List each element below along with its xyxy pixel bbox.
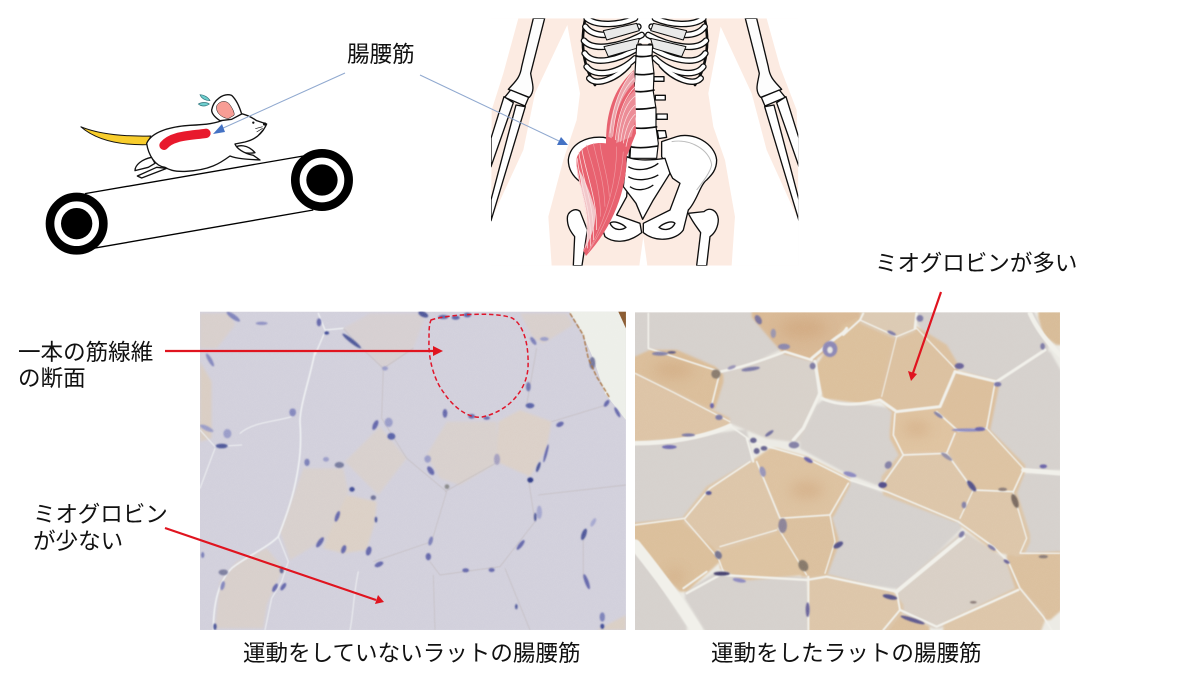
label: little myoglobin: が少ない — [33, 529, 123, 554]
white cell boundary network — [635, 313, 1060, 630]
rat ear — [212, 95, 242, 121]
white gap at top right — [569, 312, 626, 420]
treadmill belt — [85, 156, 313, 248]
label: many myoglobin: ミオグロビンが多い — [875, 251, 1077, 276]
femurs — [567, 209, 718, 266]
caption: trained rat: 運動をしたラットの腸腰筋 — [711, 641, 982, 666]
dashed outline of a single muscle fiber — [429, 314, 528, 417]
fiber boundaries — [200, 313, 358, 630]
label: iliopsoas: 腸腰筋 — [347, 42, 415, 67]
human skeleton with iliopsoas muscle — [480, 18, 810, 266]
left arm bones — [491, 18, 545, 221]
rib cage right — [648, 18, 707, 85]
rat body — [135, 113, 267, 178]
nuclei — [652, 314, 1048, 626]
rat tail — [81, 127, 151, 145]
label: cross-section of one muscle fiber: 一本の筋線維 — [18, 340, 153, 365]
grey low-myoglobin fibers — [635, 313, 1060, 630]
brown fiber edge — [570, 313, 610, 398]
rat nose and whiskers — [252, 122, 266, 135]
pelvis and sacrum — [568, 135, 717, 241]
treadmill roller: upper right — [295, 153, 349, 207]
iliopsoas muscle — [577, 70, 636, 256]
right arm bones — [745, 18, 799, 221]
label: cross-section of one muscle fiber: の断面 — [18, 366, 86, 391]
micrograph: trained rat psoas — [635, 312, 1060, 630]
darker stain patches — [653, 318, 930, 584]
myoglobin-tinted fibers — [200, 313, 626, 630]
sweat drops — [198, 95, 210, 106]
caption: untrained rat: 運動をしていないラットの腸腰筋 — [243, 641, 581, 666]
nuclei — [199, 310, 621, 630]
rib cage left — [583, 18, 642, 85]
treadmill with running rat — [50, 95, 349, 250]
highlighted psoas muscle on rat — [164, 133, 206, 145]
label: little myoglobin: ミオグロビン — [33, 502, 168, 527]
red arrow to low-myoglobin fiber — [165, 528, 384, 604]
red arrow to single fiber — [165, 346, 443, 356]
center of chest — [635, 18, 655, 43]
spine — [630, 45, 667, 158]
red arrow to high-myoglobin fiber — [908, 292, 941, 381]
body silhouette — [480, 18, 810, 266]
tan high-myoglobin fibers — [635, 313, 1060, 630]
micrograph: untrained rat psoas — [199, 310, 626, 630]
blue arrow to human muscle — [420, 75, 568, 145]
treadmill roller: lower left — [50, 197, 103, 250]
blue arrow to rat muscle — [213, 73, 345, 134]
